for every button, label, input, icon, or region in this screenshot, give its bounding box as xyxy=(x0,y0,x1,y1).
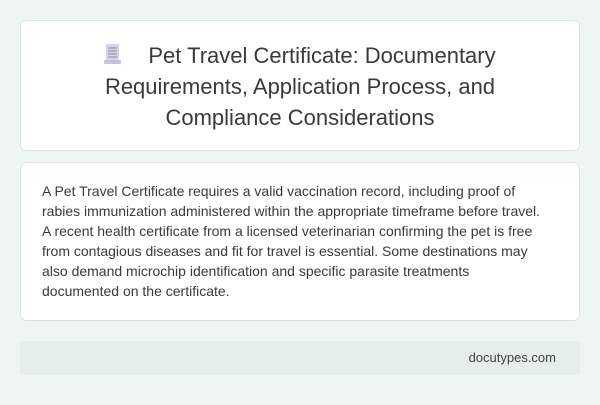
icon: document xyxy=(104,44,121,64)
title: Pet Travel Certificate: Documentary xyxy=(148,43,496,68)
panel: title card xyxy=(20,20,580,151)
title xyxy=(104,43,496,130)
footer: docutypes.com xyxy=(469,350,556,365)
footer xyxy=(20,341,580,375)
panel: description xyxy=(20,162,580,321)
title: Requirements, Application Process, and xyxy=(105,74,495,99)
text block: A Pet Travel Certificate requires a valid vaccination record, including proof of rabies immunization administered within the appropriate timeframe before travel. A recent health certificate from a licensed veterinarian confirming the pet is free from contagious diseases and fit for travel is essential. Some destinations may also demand microchip identification and specific parasite treatments documented on the certificate. xyxy=(42,183,540,299)
title: Compliance Considerations xyxy=(165,105,435,130)
